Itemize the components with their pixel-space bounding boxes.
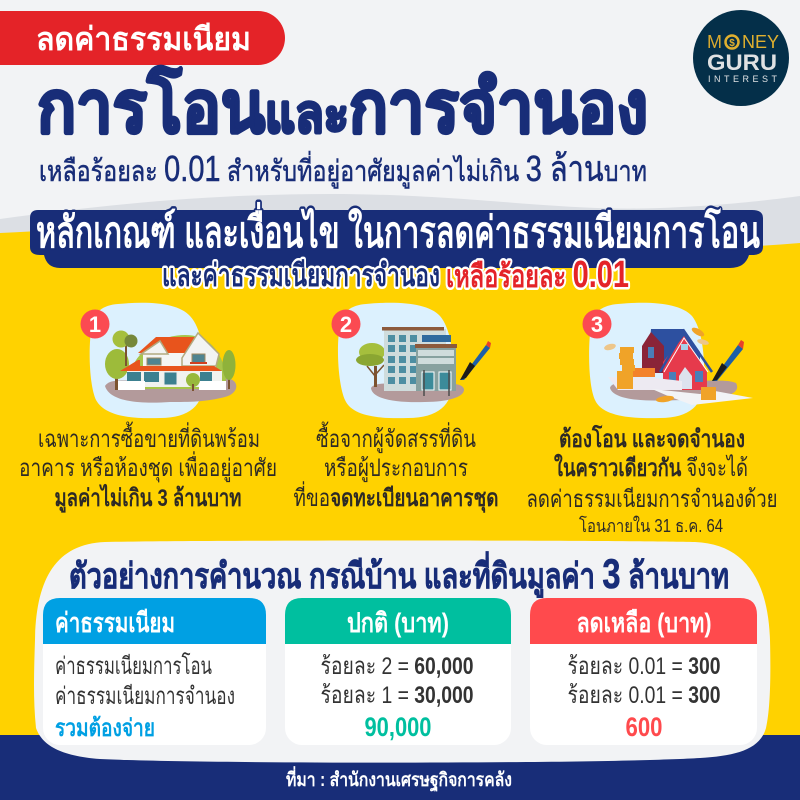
tag: red pill heading [0, 11, 285, 65]
text block: ต้องโอน และจดจำนอง [559, 424, 745, 453]
text block: โอนภายใน 31 ธ.ค. 64 [579, 515, 723, 536]
number badge: 1 [89, 312, 101, 337]
text block: เฉพาะการซื้อขายที่ดินพร้อม [38, 421, 260, 453]
table column: reduced [530, 598, 757, 745]
table column: normal [285, 598, 511, 745]
subtitle: เหลือร้อยละ 0.01 สำหรับที่อยู่อาศัยมูลค่าไม่เกิน 3 ล้านบาท [39, 148, 647, 189]
illustration blob [338, 303, 453, 418]
text block: ที่ขอจดทะเบียนอาคารชุด [294, 481, 498, 514]
table column: fees: รวมต้องจ่าย [55, 715, 155, 742]
number badge [582, 310, 612, 338]
illustration blob [90, 303, 204, 418]
title: การโอนและการจำนอง [37, 64, 648, 148]
heading: ตัวอย่างการคำนวณ กรณีบ้าน และที่ดินมูลค่า 3 ล้านบาท [69, 550, 729, 598]
icon: house with coins and contract [603, 326, 753, 405]
text block: ซื้อจากผู้จัดสรรที่ดิน [316, 421, 476, 454]
table column: fees [43, 598, 266, 745]
number badge: 3 [591, 312, 603, 337]
text block: มูลค่าไม่เกิน 3 ล้านบาท [54, 483, 242, 513]
number badge [80, 310, 110, 338]
table column: reduced: ร้อยละ 0.01 = 300 [568, 682, 720, 709]
tag: red pill heading: ลดค่าธรรมเนียม [36, 21, 251, 57]
logo: Money Guru Interest: $ [729, 38, 735, 49]
table column: normal: ร้อยละ 1 = 30,000 [320, 682, 474, 709]
table column: normal: ปกติ (บาท) [347, 608, 449, 638]
panel: step 2 [294, 303, 498, 514]
text block: หรือผู้ประกอบการ [324, 455, 468, 483]
logo: Money Guru Interest: INTEREST [708, 74, 778, 84]
logo: Money Guru Interest: GURU [707, 50, 777, 75]
logo: Money Guru Interest [693, 10, 789, 106]
table column: normal: ร้อยละ 2 = 60,000 [320, 653, 474, 680]
number badge [332, 310, 360, 338]
table column: reduced: 600 [626, 712, 662, 742]
icon: condominium building [356, 327, 491, 402]
banner: second line: เหลือร้อยละ 0.01 [446, 254, 629, 296]
illustration blob [589, 303, 704, 418]
panel: step 1 [19, 303, 277, 513]
text block [526, 424, 778, 536]
icon: house with garden [105, 330, 236, 403]
table column: normal: 90,000 [364, 712, 432, 742]
banner: second line: และค่าธรรมเนียมการจำนอง [162, 258, 440, 293]
panel: step 3 [526, 303, 778, 536]
table column: reduced: ร้อยละ 0.01 = 300 [568, 653, 720, 680]
number badge: 2 [340, 312, 352, 337]
table column: fees: ค่าธรรมเนียมการโอน [55, 652, 212, 680]
text block [19, 421, 277, 513]
table column: fees: ค่าธรรมเนียม [55, 608, 175, 638]
banner: second line [162, 254, 629, 296]
panel: calculation example [34, 540, 770, 763]
text block: อาคาร หรือห้องชุด เพื่ออยู่อาศัย [19, 451, 277, 483]
logo: Money Guru Interest: M [707, 32, 722, 52]
text block: ในคราวเดียวกัน จึงจะได้ [554, 453, 748, 482]
table column: reduced: ลดเหลือ (บาท) [576, 608, 712, 638]
text block [294, 421, 498, 514]
banner: criteria heading [30, 202, 763, 268]
table column: fees: ค่าธรรมเนียมการจำนอง [55, 683, 235, 710]
source footer: ที่มา : สำนักงานเศรษฐกิจการคลัง [286, 766, 512, 793]
logo: Money Guru Interest: NEY [742, 32, 779, 52]
